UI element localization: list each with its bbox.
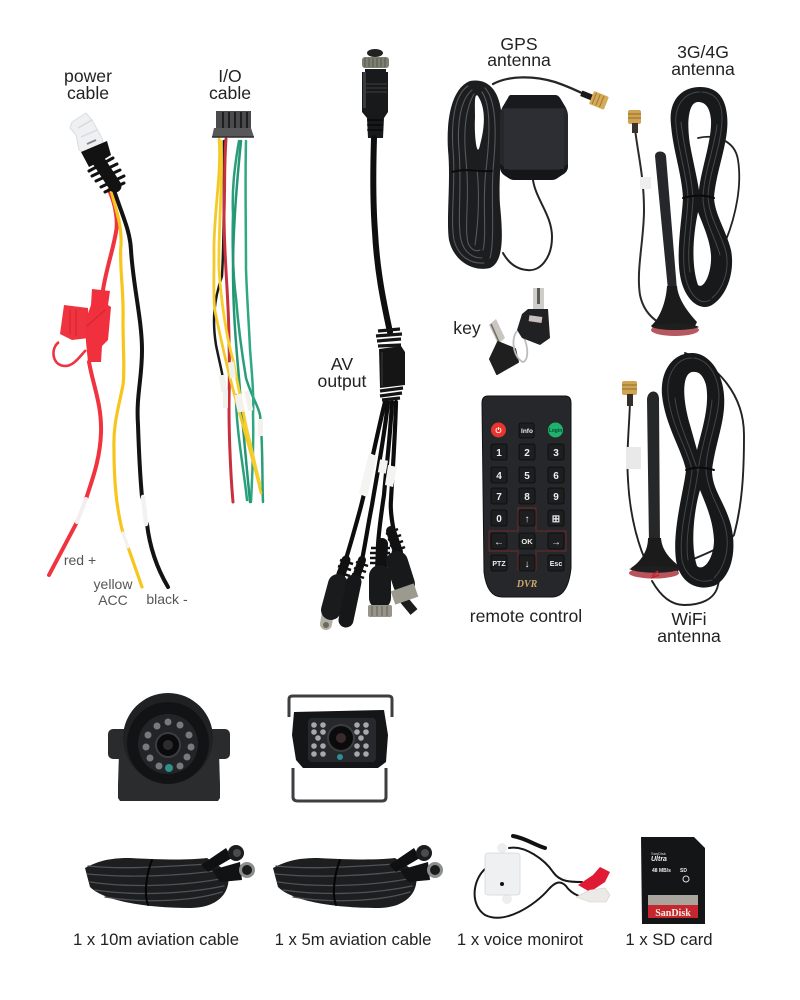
- keypad: PTZ: [492, 561, 506, 568]
- info button: Info: [521, 428, 533, 435]
- ears: [108, 729, 230, 759]
- label: WiFi antenna: antenna: [657, 626, 721, 646]
- key 1: [489, 319, 518, 374]
- label: 10m aviation cable: 1 x 10m aviation cable: [73, 930, 239, 949]
- card labels: SanDisk: [651, 851, 666, 856]
- plug lower: [400, 862, 443, 882]
- plug upper: [389, 845, 432, 872]
- branch wires: [343, 402, 396, 568]
- power cable: [49, 113, 168, 587]
- red plug: [578, 867, 610, 892]
- top cable: [493, 77, 590, 97]
- aviation socket: [386, 529, 416, 612]
- label: GPS antenna: antenna: [487, 50, 551, 70]
- coil strands: [275, 864, 413, 901]
- dome shell: [123, 693, 213, 783]
- plug lower: [212, 862, 255, 882]
- power button: [491, 422, 506, 438]
- sensor: [337, 754, 343, 760]
- keypad: ↓: [524, 559, 530, 570]
- SD card: [641, 837, 705, 924]
- whip: [655, 152, 677, 290]
- connector: [70, 113, 104, 154]
- microphone cables: [475, 848, 582, 918]
- zip tie: [334, 860, 340, 905]
- round plug: [362, 49, 389, 138]
- label: power cable: cable: [67, 83, 109, 103]
- keypad: 1: [496, 448, 502, 459]
- keypad: 6: [553, 471, 559, 482]
- tail cable: [627, 398, 648, 566]
- login button: Login: [549, 428, 562, 434]
- 10m aviation cable: [85, 845, 255, 908]
- remote body: [482, 396, 571, 597]
- cable tags: [359, 453, 397, 497]
- keypad: 5: [524, 471, 530, 482]
- multicolour wires: [214, 139, 263, 502]
- remote control: [482, 396, 571, 597]
- RCA plug white: [323, 560, 353, 628]
- SMA plug: [622, 381, 637, 406]
- loose loop: [698, 137, 739, 240]
- keypad: 7: [496, 492, 502, 503]
- fuse holder: [53, 289, 111, 366]
- AV output cable: [323, 49, 416, 628]
- info button: [519, 423, 534, 438]
- plug upper: [201, 845, 244, 872]
- junction ferrite: [376, 329, 405, 400]
- camera housing: [292, 710, 388, 768]
- outer loop cable: [652, 353, 744, 605]
- SMA plug: [628, 110, 641, 133]
- label: AV output: AV: [331, 354, 353, 374]
- keypad: ←: [494, 537, 504, 548]
- 3G/4G antenna: [628, 87, 739, 336]
- card labels: SD: [680, 868, 687, 874]
- label: 3G/4G antenna: antenna: [671, 59, 735, 79]
- navigation outline: [489, 508, 566, 570]
- split ring: [513, 331, 527, 362]
- label: voice monitor: 1 x voice monirot: [457, 930, 583, 949]
- cable coil: [662, 353, 733, 588]
- whip: [647, 392, 660, 545]
- keypad: ⊞: [552, 514, 560, 525]
- tail cable: [635, 128, 658, 322]
- wire: black: [114, 190, 168, 587]
- key 2: [517, 288, 550, 345]
- cable tag: [640, 177, 651, 189]
- rubber boot: [81, 141, 124, 192]
- keypad: 3: [553, 448, 559, 459]
- label: power cable: power: [64, 66, 112, 86]
- white plug: [576, 888, 610, 902]
- keypad: 4: [496, 471, 502, 482]
- aviation plug: [368, 544, 392, 617]
- wire tags: [219, 362, 263, 436]
- card labels: Ultra: [651, 856, 667, 863]
- SanDisk band: SanDisk: [655, 908, 691, 919]
- label: 5m aviation cable: 1 x 5m aviation cable: [275, 930, 431, 949]
- 10-pin connector: [212, 111, 254, 137]
- magnetic base: [651, 286, 699, 336]
- label: WiFi antenna: WiFi: [671, 609, 707, 629]
- mic box: [485, 843, 520, 904]
- label: yellow ACC: yellow: [94, 576, 132, 592]
- SMA plug: [579, 87, 609, 110]
- coil: [85, 858, 229, 908]
- keypad: 0: [496, 514, 502, 525]
- DVR logo: DVR: [516, 579, 538, 590]
- label: key: key: [453, 318, 481, 338]
- WiFi antenna: [622, 353, 744, 605]
- power button: ⏻: [496, 426, 503, 435]
- keypad: OK: [521, 537, 533, 546]
- camera face: [127, 702, 209, 784]
- label: remote control: remote control: [470, 606, 582, 626]
- coil strands: [87, 864, 225, 901]
- label: red +: red +: [64, 552, 96, 568]
- I/O cable: [212, 111, 263, 502]
- keypad: 9: [553, 492, 559, 503]
- bracket: [289, 696, 392, 801]
- GPS antenna: [448, 77, 609, 270]
- keypad: [491, 444, 564, 571]
- keypad: 8: [524, 492, 530, 503]
- keypad: 2: [524, 448, 530, 459]
- zip tie: [146, 860, 152, 905]
- labels: [64, 34, 735, 949]
- cable sleeve: [513, 836, 545, 848]
- cable coil: [448, 80, 502, 269]
- cable coil: [671, 87, 732, 307]
- login button: [548, 422, 563, 438]
- label: I/O cable: cable: [209, 83, 251, 103]
- keypad: ↑: [524, 514, 530, 525]
- puck body: [500, 95, 568, 180]
- label: AV output: output: [318, 371, 367, 391]
- faceplate: [308, 718, 376, 762]
- keypad: →: [551, 537, 561, 548]
- voice monitor: [475, 836, 610, 918]
- key set: [489, 288, 550, 374]
- 5m aviation cable: [273, 845, 443, 908]
- card labels: [651, 851, 689, 882]
- rear view camera: [289, 696, 392, 801]
- wire: yellow: [111, 190, 142, 587]
- card body: [641, 837, 705, 924]
- tail cable: [503, 180, 552, 270]
- label: I/O cable: I/O: [218, 66, 242, 86]
- coil: [273, 858, 417, 908]
- mount base: [118, 752, 220, 801]
- label: SD card: 1 x SD card: [625, 930, 713, 949]
- DC plug: [346, 560, 368, 620]
- wire: red: [49, 190, 117, 575]
- card labels: 48 MB/s: [652, 868, 671, 874]
- label: black -: black -: [146, 591, 188, 607]
- cable tag: [626, 447, 641, 469]
- label: yellow ACC: ACC: [98, 592, 128, 608]
- label: GPS antenna: GPS: [500, 34, 538, 54]
- label: 3G/4G antenna: 3G/4G: [677, 42, 729, 62]
- IR LEDs: [311, 722, 369, 757]
- keypad: Esc: [550, 561, 562, 568]
- lens: [328, 725, 354, 751]
- dome camera: [108, 693, 230, 801]
- magnetic base: [629, 538, 680, 578]
- main cable: [373, 138, 390, 332]
